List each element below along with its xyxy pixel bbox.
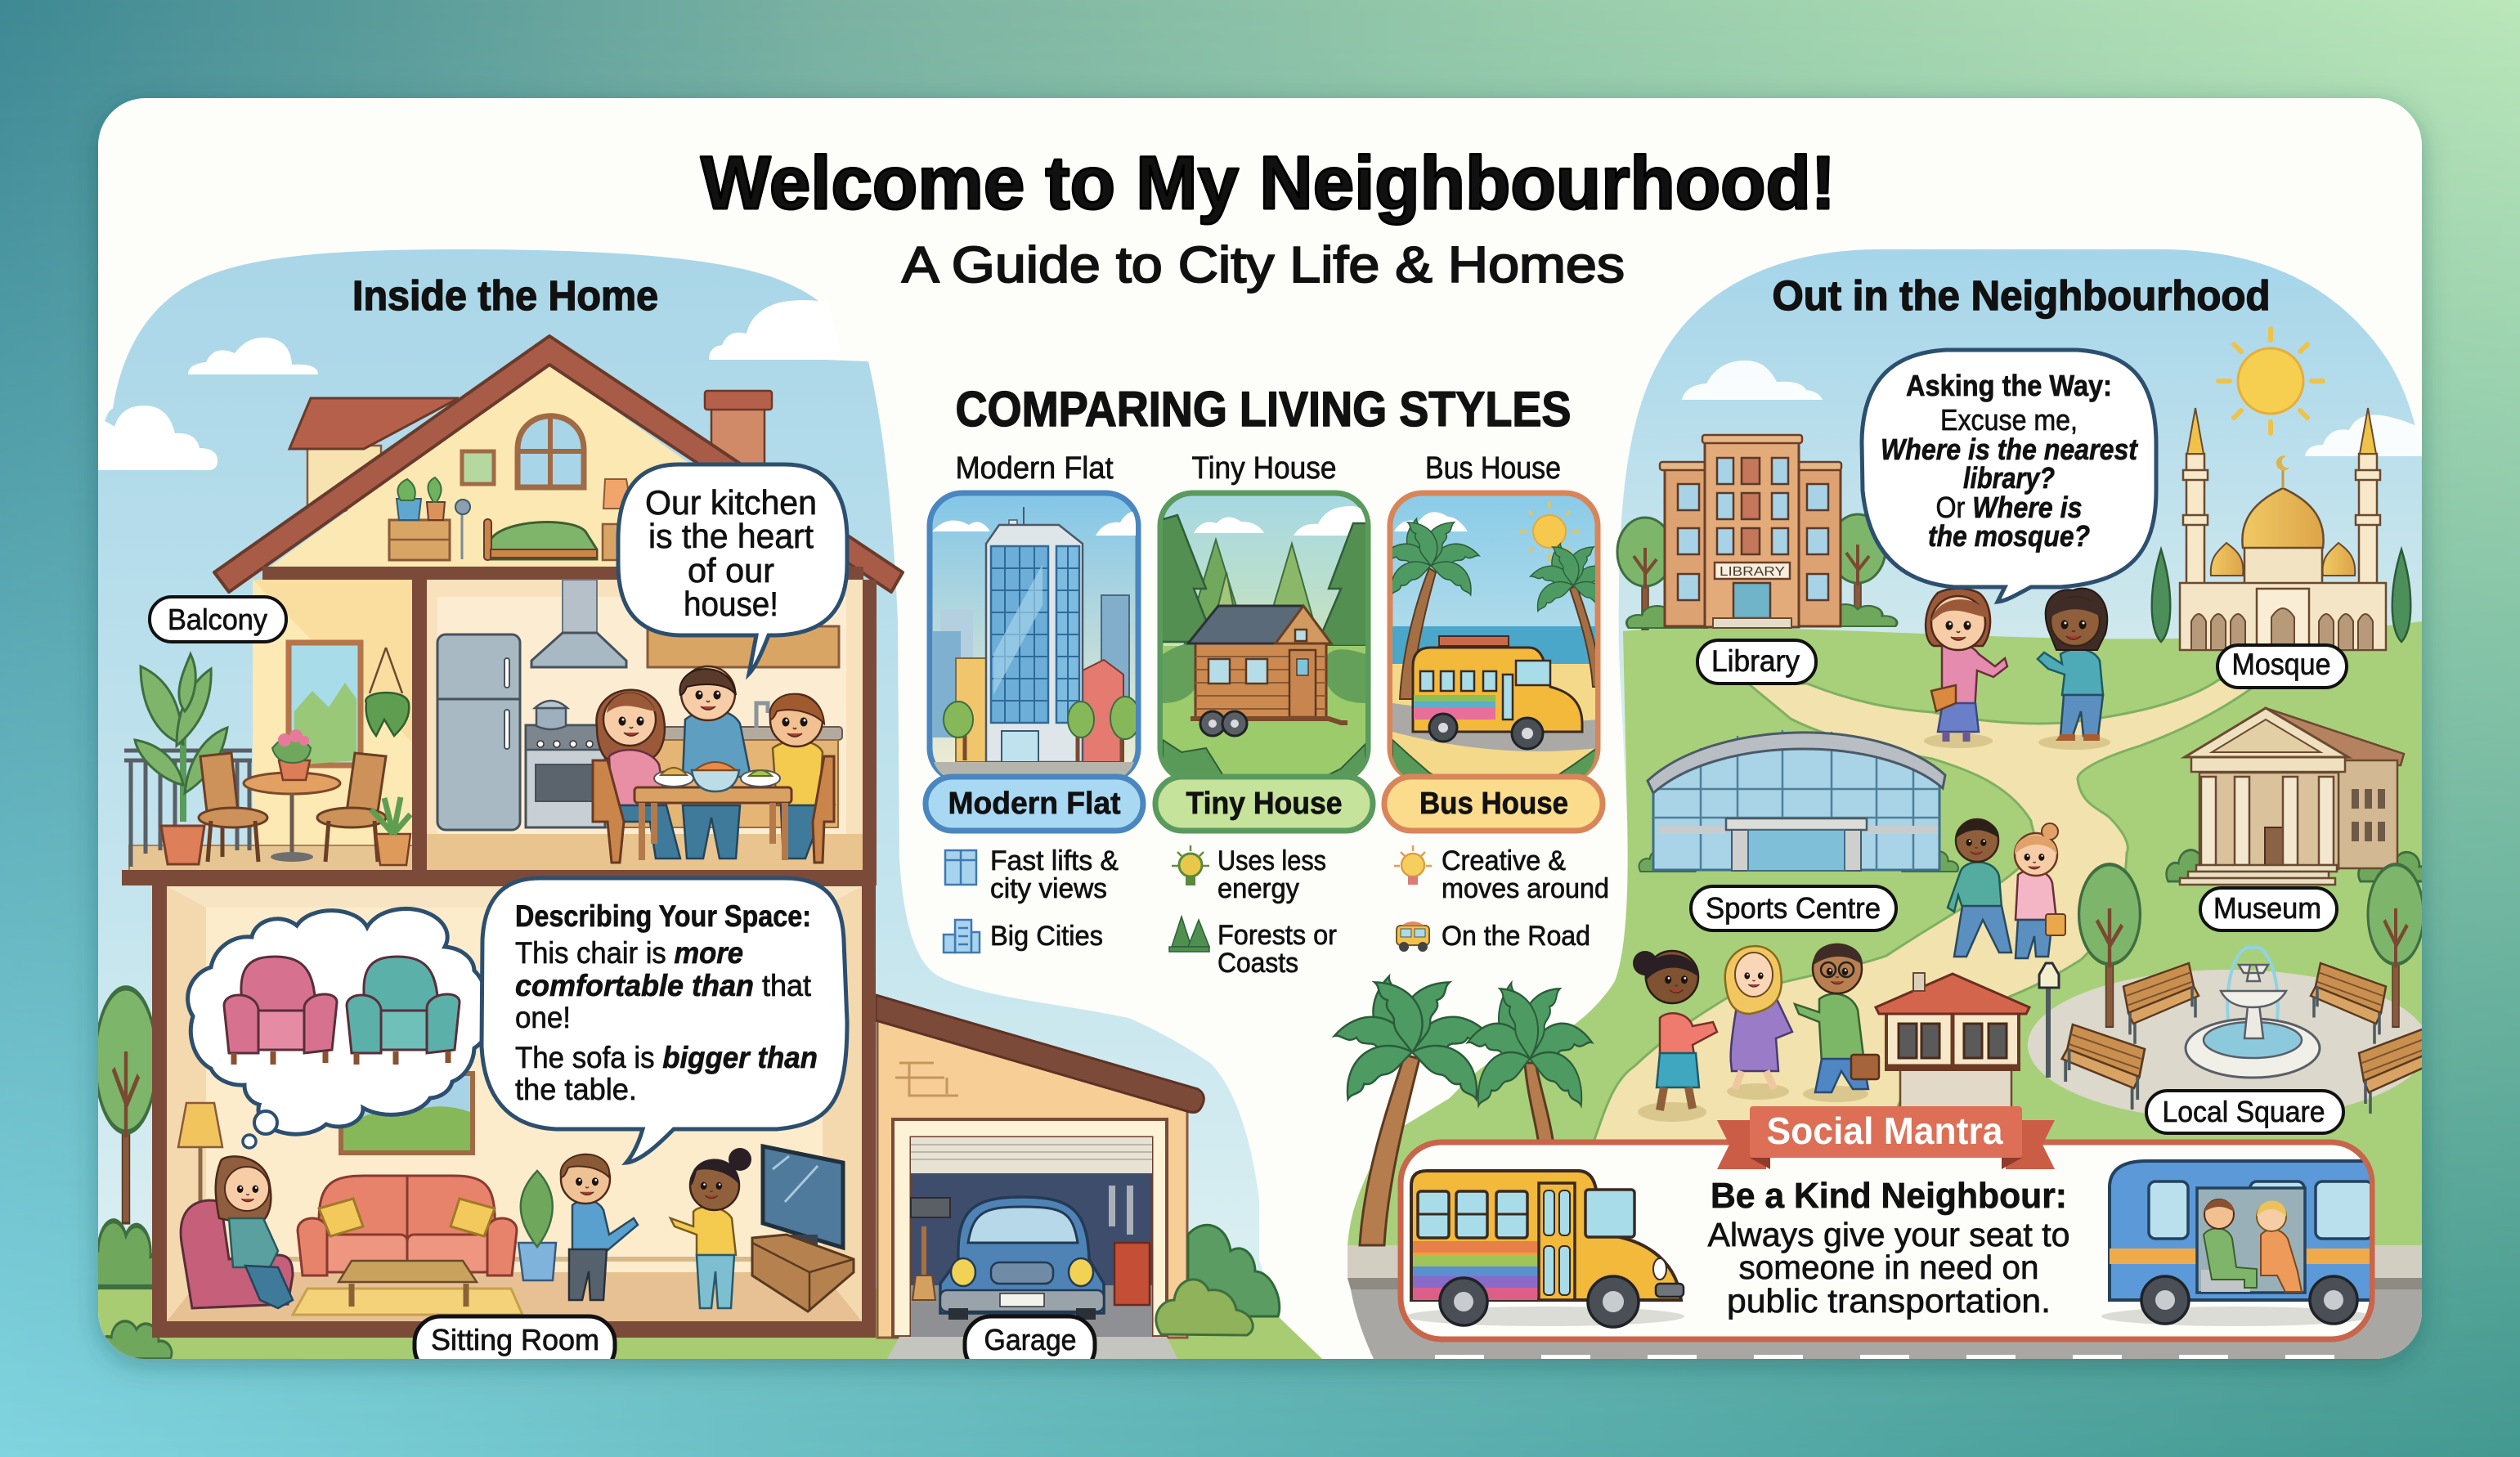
clouds	[98, 300, 842, 470]
upper storey	[214, 336, 903, 592]
speech bubble: asking the way: the mosque?	[1928, 519, 2090, 553]
column: modern flat	[926, 451, 1145, 953]
library	[1617, 435, 1897, 630]
feature: fast lifts and city views: city views	[990, 873, 1107, 904]
speech bubble: asking the way: Where is the nearest	[1881, 433, 2139, 466]
speech bubble: asking the way: Asking the Way:	[1906, 369, 2112, 402]
feature: creative and moves around: Creative &	[1442, 845, 1566, 876]
label: library	[1697, 640, 1816, 684]
feature: creative and moves around	[1394, 845, 1609, 904]
rug and coffee table	[293, 1261, 522, 1315]
sky backdrop	[98, 249, 1322, 1359]
thought cloud with two armchairs	[188, 909, 489, 1148]
grass	[1347, 621, 2422, 1359]
garage bushes	[1156, 1225, 1280, 1335]
panel: comparing living styles	[926, 382, 1616, 979]
blue bus with passengers	[2101, 1161, 2379, 1326]
clouds	[1682, 361, 2422, 456]
panel: out in the neighbourhood	[1334, 249, 2434, 1361]
floor lamp	[178, 1103, 222, 1202]
subtitle: A Guide to City Life & Homes	[902, 237, 1625, 294]
feature: creative and moves around: moves around	[1442, 873, 1609, 904]
attic window and furniture	[389, 416, 631, 560]
feature: forests or coasts: Forests or	[1217, 920, 1337, 951]
label: sitting room	[415, 1316, 615, 1374]
mosque	[2152, 408, 2410, 650]
kitchen	[122, 580, 877, 885]
panel: social mantra	[1401, 1106, 2379, 1339]
label: local square	[2146, 1091, 2343, 1133]
potted plant	[518, 1171, 556, 1280]
mantra text: Be a Kind Neighbour:	[1711, 1176, 2067, 1216]
feature: fast lifts and city views: Fast lifts &	[990, 845, 1119, 876]
speech bubble: describing your space: The sofa is bigger than	[515, 1041, 818, 1074]
column: tiny house	[1149, 451, 1374, 979]
mantra text: public transportation.	[1727, 1282, 2051, 1320]
label: mosque	[2217, 645, 2347, 688]
garage	[876, 995, 1204, 1359]
label: sports centre: Sports Centre	[1706, 891, 1881, 925]
title: Welcome to My Neighbourhood!	[701, 141, 1836, 225]
feature: forests or coasts	[1169, 917, 1337, 979]
feature: on the road: On the Road	[1442, 921, 1590, 952]
seated woman and armchair	[181, 1156, 293, 1308]
library: LIBRARY	[1720, 565, 1785, 579]
speech bubble: kitchen: is the heart	[648, 517, 814, 555]
name pill: bus house	[1384, 777, 1603, 831]
name pill: modern flat	[926, 777, 1143, 831]
label: museum: Museum	[2213, 891, 2321, 925]
sun	[2218, 329, 2323, 433]
feature: forests or coasts: Coasts	[1217, 948, 1298, 979]
ribbon banner: Social Mantra	[1766, 1110, 2003, 1152]
speech bubble: kitchen: Our kitchen	[645, 483, 817, 522]
illustration: tiny house on wheels	[1149, 493, 1374, 785]
man standing	[561, 1154, 638, 1300]
speech bubble: describing your space: one!	[515, 1001, 571, 1034]
school bus	[1406, 1171, 1684, 1327]
speech bubble: asking the way	[1862, 350, 2156, 602]
feature: uses less energy	[1172, 845, 1326, 904]
mantra text: someone in need on	[1738, 1249, 2039, 1286]
feature: uses less energy: energy	[1217, 873, 1299, 904]
column: bus house: Bus House	[1425, 451, 1561, 486]
balcony	[124, 580, 414, 872]
feature: uses less energy: Uses less	[1217, 845, 1326, 876]
speech bubble: kitchen: house!	[684, 585, 778, 623]
column: bus house	[1383, 451, 1616, 952]
museum	[2167, 708, 2433, 885]
speech bubble: kitchen: of our	[688, 551, 774, 590]
palm trees	[1334, 970, 1593, 1245]
name pill: tiny house: Tiny House	[1186, 787, 1343, 821]
speech bubble: asking the way: Or Where is	[1936, 491, 2082, 524]
sitting room	[152, 878, 876, 1338]
label: balcony: Balcony	[168, 603, 267, 636]
speech bubble: asking the way: library?	[1963, 461, 2055, 495]
speech bubble: describing your space: This chair is more	[515, 936, 743, 970]
heading: inside the home: Inside the Home	[352, 272, 658, 319]
panel: inside the home	[83, 249, 1322, 1374]
television and stand	[752, 1146, 854, 1311]
speech bubble: describing your space: Describing Your Space:	[515, 899, 811, 933]
road and pavement	[1347, 1245, 2422, 1361]
feature: big cities: Big Cities	[990, 921, 1103, 952]
plaza	[2028, 970, 2428, 1120]
speech bubble: asking the way: Excuse me,	[1940, 403, 2078, 437]
label: sports centre	[1691, 886, 1896, 930]
speech bubble: kitchen	[618, 464, 847, 674]
column: modern flat: Modern Flat	[955, 451, 1114, 486]
name pill: tiny house	[1155, 777, 1373, 831]
sports centre	[1639, 730, 1958, 872]
label: library: Library	[1711, 644, 1800, 678]
wall painting	[341, 1074, 473, 1153]
speech bubble: describing your space: comfortable than that	[515, 969, 812, 1002]
sky backdrop	[1619, 249, 2422, 818]
column: tiny house: Tiny House	[1192, 451, 1336, 486]
label: garage: Garage	[984, 1323, 1076, 1356]
traditional house	[1876, 963, 2059, 1119]
label: garage	[965, 1316, 1095, 1374]
label: sitting room: Sitting Room	[431, 1323, 599, 1356]
illustration: tower block	[930, 493, 1145, 782]
fountain and benches	[2062, 948, 2434, 1114]
greeting group	[1633, 944, 1879, 1122]
comparison heading: COMPARING LIVING STYLES	[955, 382, 1572, 437]
illustration: bus on the beach	[1383, 493, 1616, 783]
heading: out in the neighbourhood: Out in the Neighbourhood	[1773, 272, 2270, 319]
garden trees and bushes	[98, 985, 173, 1359]
square trees	[2079, 864, 2424, 1027]
feature: big cities	[944, 920, 1103, 953]
mantra text: Always give your seat to	[1707, 1216, 2070, 1253]
car	[940, 1197, 1104, 1320]
feature: fast lifts and city views	[945, 845, 1119, 904]
label: balcony	[150, 597, 286, 642]
people asking the way	[1924, 589, 2110, 750]
label: mosque: Mosque	[2232, 648, 2330, 681]
sofa	[298, 1176, 517, 1275]
family at kitchen table	[593, 666, 834, 863]
label: museum	[2200, 888, 2337, 930]
label: local square: Local Square	[2162, 1095, 2325, 1128]
girl standing	[670, 1148, 751, 1308]
ribbon banner	[1717, 1106, 2055, 1169]
ground	[98, 1289, 1322, 1359]
speech bubble: describing your space	[482, 878, 847, 1163]
footpaths	[1593, 679, 2253, 1145]
mantra text	[1707, 1176, 2070, 1320]
walking couple	[1948, 819, 2065, 958]
name pill: bus house: Bus House	[1419, 787, 1568, 821]
name pill: modern flat: Modern Flat	[948, 787, 1121, 821]
speech bubble: describing your space: the table.	[515, 1073, 637, 1106]
